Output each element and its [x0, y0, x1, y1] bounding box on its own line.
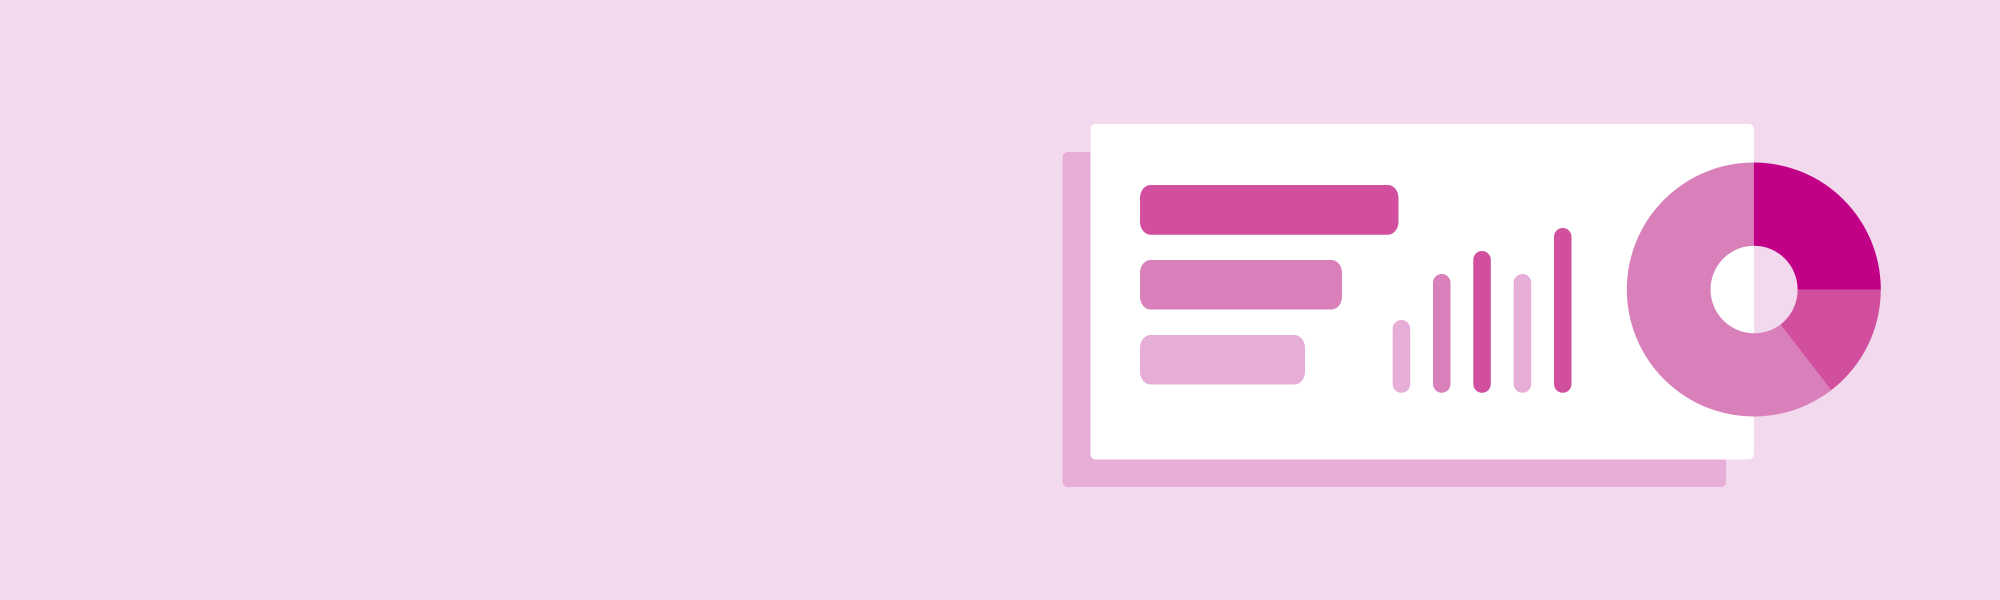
vertical bar chart: [1393, 228, 1572, 393]
donut segment: lower right: [1780, 290, 1881, 390]
donut segment: large: [1627, 162, 1831, 416]
horizontal bar chart: [1140, 185, 1398, 384]
donut chart: [1627, 162, 1881, 416]
bar: short: [1140, 335, 1305, 384]
column 2: [1433, 274, 1450, 393]
column 4: [1514, 274, 1531, 393]
bar: medium: [1140, 260, 1342, 310]
donut segment: top right: [1754, 162, 1881, 290]
panel: back shadow card: [1062, 152, 1726, 487]
column 1: [1393, 320, 1410, 393]
panel: white front card: [1090, 124, 1754, 460]
column 3: [1473, 251, 1491, 393]
column 5: [1554, 228, 1572, 393]
bar: long: [1140, 185, 1398, 235]
